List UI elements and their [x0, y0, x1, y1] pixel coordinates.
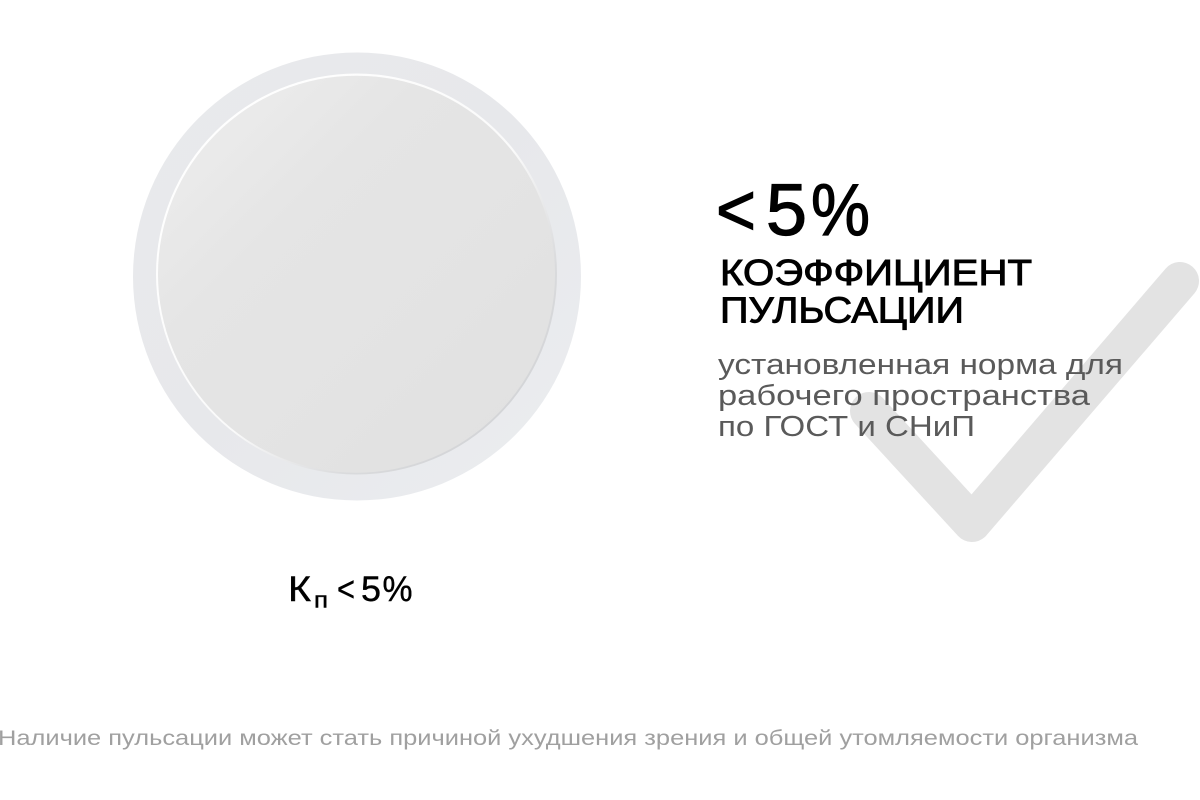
icon: background check mark [869, 281, 1180, 523]
description text: по ГОСТ и СНиП [718, 411, 975, 443]
big value: % [811, 170, 870, 251]
footer note: Наличие пульсации может стать причиной ухудшения зрения и общей утомляемости организма [0, 726, 1138, 750]
heading: КОЭФФИЦИЕНТ [720, 252, 1032, 293]
round LED panel [133, 52, 581, 500]
big value [716, 170, 870, 251]
panel caption: pulsation value: К [288, 570, 312, 609]
description text [718, 349, 1123, 443]
big value: 5 [766, 170, 807, 251]
big value: < [716, 170, 756, 251]
description text: рабочего пространства [718, 380, 1090, 412]
panel caption: pulsation value: % [382, 570, 412, 609]
heading [720, 252, 1032, 330]
panel caption: pulsation value: < [337, 570, 355, 609]
panel caption: pulsation value: п [314, 588, 328, 612]
panel caption: pulsation value: 5 [361, 570, 381, 609]
panel caption: pulsation value [288, 570, 412, 612]
description text: установленная норма для [718, 349, 1123, 381]
heading: ПУЛЬСАЦИИ [720, 290, 964, 330]
